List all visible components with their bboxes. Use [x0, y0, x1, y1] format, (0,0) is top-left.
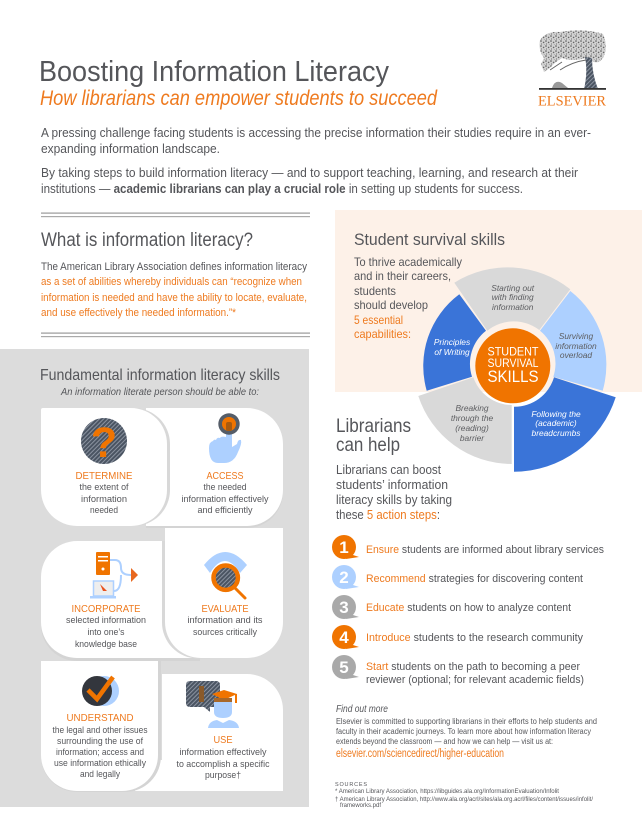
body text: To thrive academically: [354, 255, 462, 269]
step 2: [332, 565, 583, 589]
body text: capabilities:: [354, 327, 411, 341]
icon: number 1: [332, 535, 359, 559]
title: Boosting Information Literacy: [39, 56, 389, 88]
segment labels: Following the: [531, 409, 581, 419]
body text: these 5 action steps:: [336, 507, 440, 522]
heading: Fundamental information literacy skills: [40, 367, 280, 384]
intro text: [41, 126, 591, 196]
label: UNDERSTAND: [66, 712, 134, 724]
card: understand: information; access and: [56, 747, 144, 758]
paragraph: [336, 717, 597, 746]
body text: students’ information: [336, 477, 448, 492]
card: understand: use information ethically: [54, 758, 146, 769]
card: determine: [41, 408, 170, 526]
icon: eye and magnifier: [204, 552, 247, 598]
heading: can help: [336, 434, 400, 456]
heading: Student survival skills: [354, 230, 505, 249]
body text: students: [354, 284, 396, 298]
segment labels: breadcrumbs: [532, 428, 581, 438]
card: understand: surrounding the use of: [57, 736, 143, 747]
definition text: [41, 261, 308, 319]
paragraph: faculty in their academic journeys. To learn more about how information literacy: [336, 727, 591, 736]
step 1: [332, 535, 604, 559]
icon: computers: [90, 552, 138, 598]
sources: SOURCES: [335, 782, 367, 788]
step 5: [332, 655, 584, 686]
icon: question mark: ?: [91, 419, 117, 467]
step 5: Start students on the path to becoming a peer: [366, 661, 580, 673]
label: DETERMINE: [76, 470, 132, 482]
intro text: expanding information landscape.: [41, 142, 220, 156]
segment labels: [434, 283, 597, 443]
heading: [336, 415, 411, 456]
heading: Librarians: [336, 415, 411, 437]
segment labels: through the: [451, 413, 494, 423]
center circle: [475, 328, 550, 403]
step 4: [332, 625, 583, 649]
definition text: and use effectively the needed information.”*: [41, 307, 237, 319]
segment: surviving overload: [540, 291, 606, 391]
body text: Librarians can boost: [336, 462, 441, 477]
segment labels: information: [492, 302, 534, 312]
icon: number 2: [332, 565, 359, 589]
label: ACCESS: [206, 470, 244, 482]
step 4: Introduce students to the research community: [366, 632, 583, 644]
segment labels: (reading): [455, 423, 489, 433]
paragraph: Elsevier is committed to supporting librarians in their efforts to help students and: [336, 717, 597, 726]
segment: breaking barrier: [418, 377, 512, 464]
definition text: The American Library Association defines information literacy: [41, 261, 308, 273]
body text: [354, 255, 462, 341]
card: incorporate: selected information: [66, 615, 146, 626]
icon: number 5: 5: [339, 658, 349, 677]
card: use: to accomplish a specific: [176, 759, 270, 770]
card: access: [146, 408, 283, 528]
segment labels: Starting out: [491, 283, 535, 293]
intro text: A pressing challenge facing students is accessing the precise information their studies require in an ever-: [41, 126, 591, 140]
icon: hand: [209, 413, 241, 463]
segment labels: information: [555, 341, 597, 351]
body text: and in their careers,: [354, 269, 451, 283]
label: USE: [214, 734, 232, 746]
card: determine: the extent of: [80, 482, 129, 493]
card: access: the needed: [204, 482, 246, 493]
segment labels: overload: [560, 350, 592, 360]
chart: survival skills wheel: [418, 267, 616, 472]
center label: SKILLS: [488, 367, 538, 386]
card: determine: needed: [90, 505, 118, 516]
center label: [488, 345, 539, 386]
panel: fundamental skills: [0, 349, 309, 807]
heading: What is information literacy?: [41, 230, 253, 251]
sources: frameworks.pdf: [340, 803, 381, 809]
definition text: as a set of abilities whereby individuals can “recognize when: [41, 276, 302, 288]
card: evaluate: sources critically: [193, 627, 257, 638]
step 2: Recommend strategies for discovering content: [366, 573, 583, 585]
center label: SURVIVAL: [488, 356, 539, 370]
step 1: Ensure students are informed about library services: [366, 544, 604, 556]
body text: should develop: [354, 298, 428, 312]
card: incorporate: [41, 541, 200, 661]
card: use: purpose†: [205, 770, 241, 781]
card: evaluate: [162, 528, 283, 658]
paragraph: extends beyond the classroom — and how we can help — visit us at:: [336, 737, 553, 746]
segment: starting out: [454, 267, 570, 331]
body text: literacy skills by taking: [336, 492, 452, 507]
wordmark: ELSEVIER: [538, 94, 606, 110]
label: INCORPORATE: [72, 603, 140, 615]
card: evaluate: information and its: [188, 615, 263, 626]
body text: [336, 462, 452, 522]
panel: librarians can help: [332, 415, 604, 686]
icon: number 3: 3: [339, 598, 349, 617]
icon: Elsevier logo: [538, 30, 606, 109]
segment: principles of writing: [423, 294, 486, 391]
intro text: institutions — academic librarians can play a crucial role in setting up students for success.: [41, 182, 523, 196]
segment labels: of Writing: [434, 347, 470, 357]
step 3: [332, 595, 571, 619]
panel: student survival skills: [335, 210, 642, 472]
segment labels: barrier: [460, 433, 485, 443]
card: use: [135, 674, 283, 791]
card: incorporate: into one’s: [88, 627, 125, 638]
heading: Find out more: [336, 704, 388, 715]
body text: 5 essential: [354, 313, 403, 327]
segment labels: (academic): [535, 418, 577, 428]
step 3: Educate students on how to analyze content: [366, 602, 571, 614]
sources: † American Library Association, http://www.ala.org/acrl/sites/ala.org.acrl/files/content/issues/infolit/: [335, 797, 593, 803]
icon: number 4: [332, 625, 359, 649]
segment labels: Surviving: [559, 331, 594, 341]
step 5: reviewer (optional; for relevant academic fields): [366, 674, 584, 686]
icon: number 4: 4: [339, 628, 349, 647]
card: understand: and legally: [80, 769, 120, 780]
icon: number 2: 2: [339, 568, 349, 587]
card: understand: the legal and other issues: [52, 725, 148, 736]
link: elsevier.com/sciencedirect/higher-education: [336, 748, 504, 760]
icon: number 1: 1: [339, 538, 349, 557]
definition text: information is needed and have the ability to locate, evaluate,: [41, 292, 307, 304]
tree: [539, 30, 606, 90]
card: access: and efficiently: [198, 505, 253, 516]
card: incorporate: knowledge base: [75, 639, 137, 650]
panel: find out more: [336, 704, 597, 760]
label: EVALUATE: [202, 603, 248, 615]
panel: what is information literacy: [41, 230, 308, 319]
icon: number 3: [332, 595, 359, 619]
segment: following breadcrumbs: [514, 377, 616, 472]
subtitle: How librarians can empower students to succeed: [40, 87, 438, 110]
segment labels: with finding: [492, 292, 534, 302]
intro text: By taking steps to build information literacy — and to support teaching, learning, and research at their: [41, 166, 578, 180]
subheading: An information literate person should be able to:: [60, 386, 259, 398]
card: use: information effectively: [180, 747, 267, 758]
sources: [335, 782, 593, 809]
center label: STUDENT: [488, 345, 539, 359]
segment labels: Breaking: [455, 403, 489, 413]
card: understand: [41, 661, 161, 792]
icon: check mark: [82, 676, 119, 706]
card: determine: information: [81, 494, 127, 505]
card: access: information effectively: [182, 494, 269, 505]
icon: speech bubble and graduate: [186, 681, 239, 728]
sources: * American Library Association, https://libguides.ala.org/InformationEvaluation/Infolit: [335, 789, 559, 795]
segment labels: Principles: [434, 337, 471, 347]
icon: number 5: [332, 655, 359, 679]
